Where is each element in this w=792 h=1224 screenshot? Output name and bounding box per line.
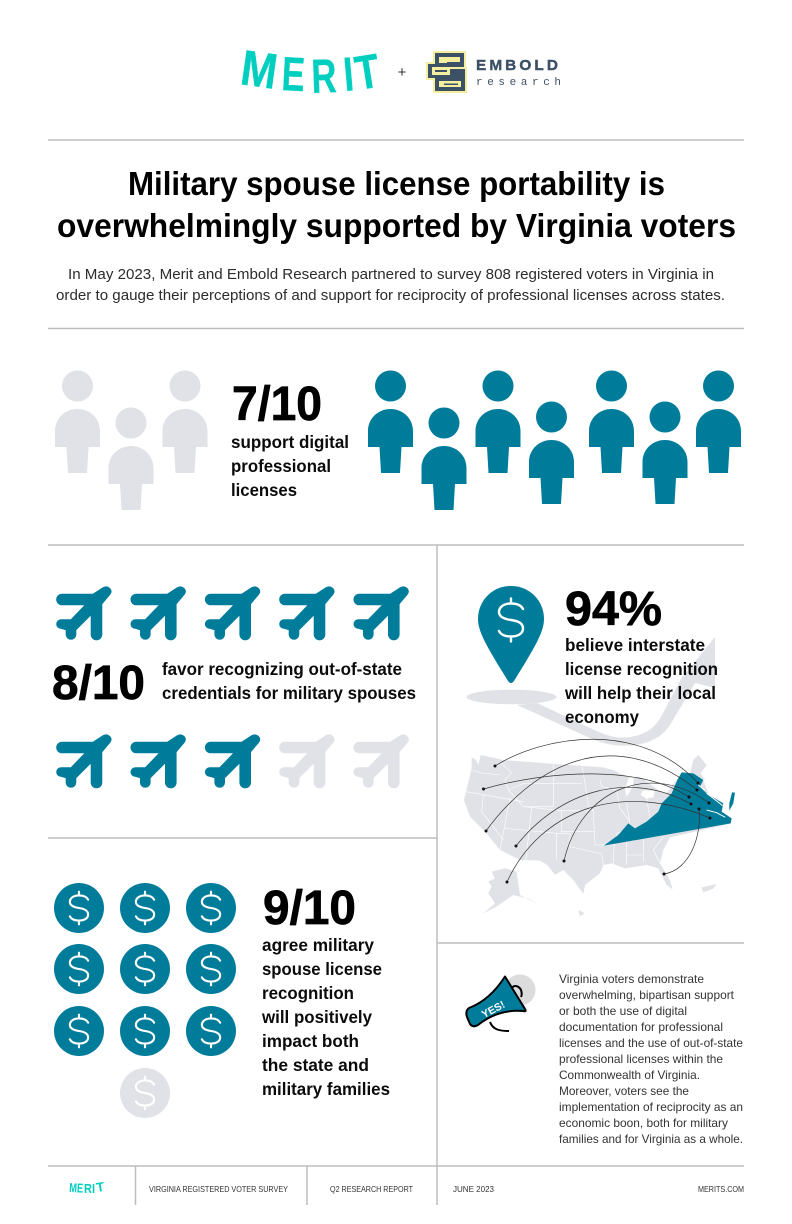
statistic caption: believe interstate (565, 635, 705, 655)
summary text: Virginia voters demonstrate (559, 973, 704, 986)
statistic caption: professional (231, 456, 331, 476)
intro text: order to gauge their perceptions of and support for reciprocity of professional licenses across states. (56, 287, 725, 304)
panel: summary callout (466, 973, 743, 1146)
statistic caption: the state and (262, 1055, 369, 1075)
icon: megaphone (466, 974, 536, 1031)
statistic caption (564, 635, 718, 727)
dividers (48, 140, 744, 1205)
summary text: documentation for professional (559, 1021, 723, 1034)
footer logo (69, 1179, 105, 1196)
footer labels: Q2 RESEARCH REPORT (330, 1185, 413, 1194)
statistic caption: recognition (262, 983, 354, 1003)
logo: Merit: R (311, 50, 337, 104)
US map with Virginia highlighted (464, 739, 735, 916)
growth arrow (517, 637, 715, 746)
panel: local economy 94% (464, 583, 735, 916)
footer labels: JUNE 2023 (453, 1185, 494, 1194)
statistic caption: military families (262, 1079, 390, 1099)
grey people icons (55, 370, 208, 510)
Alaska (483, 868, 540, 913)
contiguous states (464, 755, 732, 894)
summary text: families and for Virginia as a whole. (559, 1133, 743, 1146)
plane icons row one (56, 587, 409, 640)
statistic caption: will help their local (564, 683, 716, 703)
summary text: implementation of reciprocity as an (559, 1101, 743, 1114)
plus sign: + (398, 64, 407, 81)
connection arcs (484, 739, 710, 882)
summary text: Commonwealth of Virginia. (559, 1069, 700, 1082)
statistic caption: will positively (261, 1007, 372, 1027)
statistic caption: support digital (231, 432, 349, 452)
statistic caption (162, 659, 416, 703)
panel: digital licenses 7/10 (55, 370, 741, 510)
ground shadow (466, 690, 556, 704)
panel: military spouses 8/10 (52, 587, 416, 788)
statistic 9/10: 9/10 (263, 882, 356, 935)
footer logo: T (95, 1179, 105, 1195)
title (57, 166, 736, 245)
statistic caption: license recognition (565, 659, 718, 679)
statistic 7/10: 7/10 (232, 378, 322, 431)
Virginia (604, 772, 732, 846)
statistic caption: agree military (262, 935, 374, 955)
map dots (482, 764, 712, 884)
summary text (559, 973, 743, 1146)
logo: Merit: T (351, 45, 383, 101)
title: overwhelmingly supported by Virginia voters (57, 208, 736, 245)
statistic caption (261, 935, 390, 1099)
summary text: licenses and the use of out-of-state (559, 1037, 743, 1050)
logo: Merit: M (237, 39, 281, 100)
intro text: In May 2023, Merit and Embold Research partnered to survey 808 registered voters in Virginia in (68, 266, 714, 283)
footer labels (149, 1185, 744, 1194)
statistic caption: spouse license (262, 959, 382, 979)
statistic 94%: 94% (565, 583, 662, 636)
New England (690, 755, 707, 780)
dollar coin icons (54, 883, 236, 1118)
map pin icon (478, 586, 544, 683)
intro text (56, 266, 725, 304)
footer (69, 1179, 744, 1196)
footer labels: MERITS.COM (698, 1185, 744, 1194)
summary text: Moreover, voters see the (559, 1085, 689, 1098)
summary text: economic boon, both for military (559, 1117, 728, 1130)
panel: positive impact 9/10 (54, 882, 390, 1118)
statistic caption: licenses (231, 480, 297, 500)
title: Military spouse license portability is (128, 166, 665, 203)
statistic 8/10: 8/10 (52, 657, 145, 710)
summary text: professional licenses within the (559, 1053, 723, 1066)
footer logo: ME (69, 1180, 84, 1196)
statistic caption: credentials for military spouses (162, 683, 416, 703)
statistic caption: favor recognizing out-of-state (162, 659, 402, 679)
icon: megaphone: YES! (480, 999, 507, 1021)
logo: Embold Research: research (476, 77, 561, 89)
footer logo: RI (84, 1181, 95, 1196)
logo: Merit (237, 39, 383, 104)
teal people icons (368, 370, 741, 510)
Hawaii (578, 910, 585, 916)
plane icons row two (56, 735, 409, 788)
logo: Merit: I (341, 48, 356, 102)
footer labels: VIRGINIA REGISTERED VOTER SURVEY (149, 1185, 288, 1194)
logo: Embold Research: EMBOLD (476, 57, 561, 74)
statistic caption: impact both (262, 1031, 359, 1051)
summary text: overwhelming, bipartisan support (559, 989, 735, 1002)
statistic caption: economy (565, 707, 639, 727)
logo: Merit: E (280, 48, 306, 102)
Delmarva island (729, 792, 735, 811)
state borders (466, 763, 663, 865)
Chesapeake inlets (698, 785, 725, 817)
logo: Embold Research (426, 51, 561, 93)
statistic caption (231, 432, 349, 500)
Puerto Rico (702, 884, 717, 892)
summary text: or both the use of digital (559, 1005, 687, 1018)
Great Lakes (625, 777, 655, 799)
